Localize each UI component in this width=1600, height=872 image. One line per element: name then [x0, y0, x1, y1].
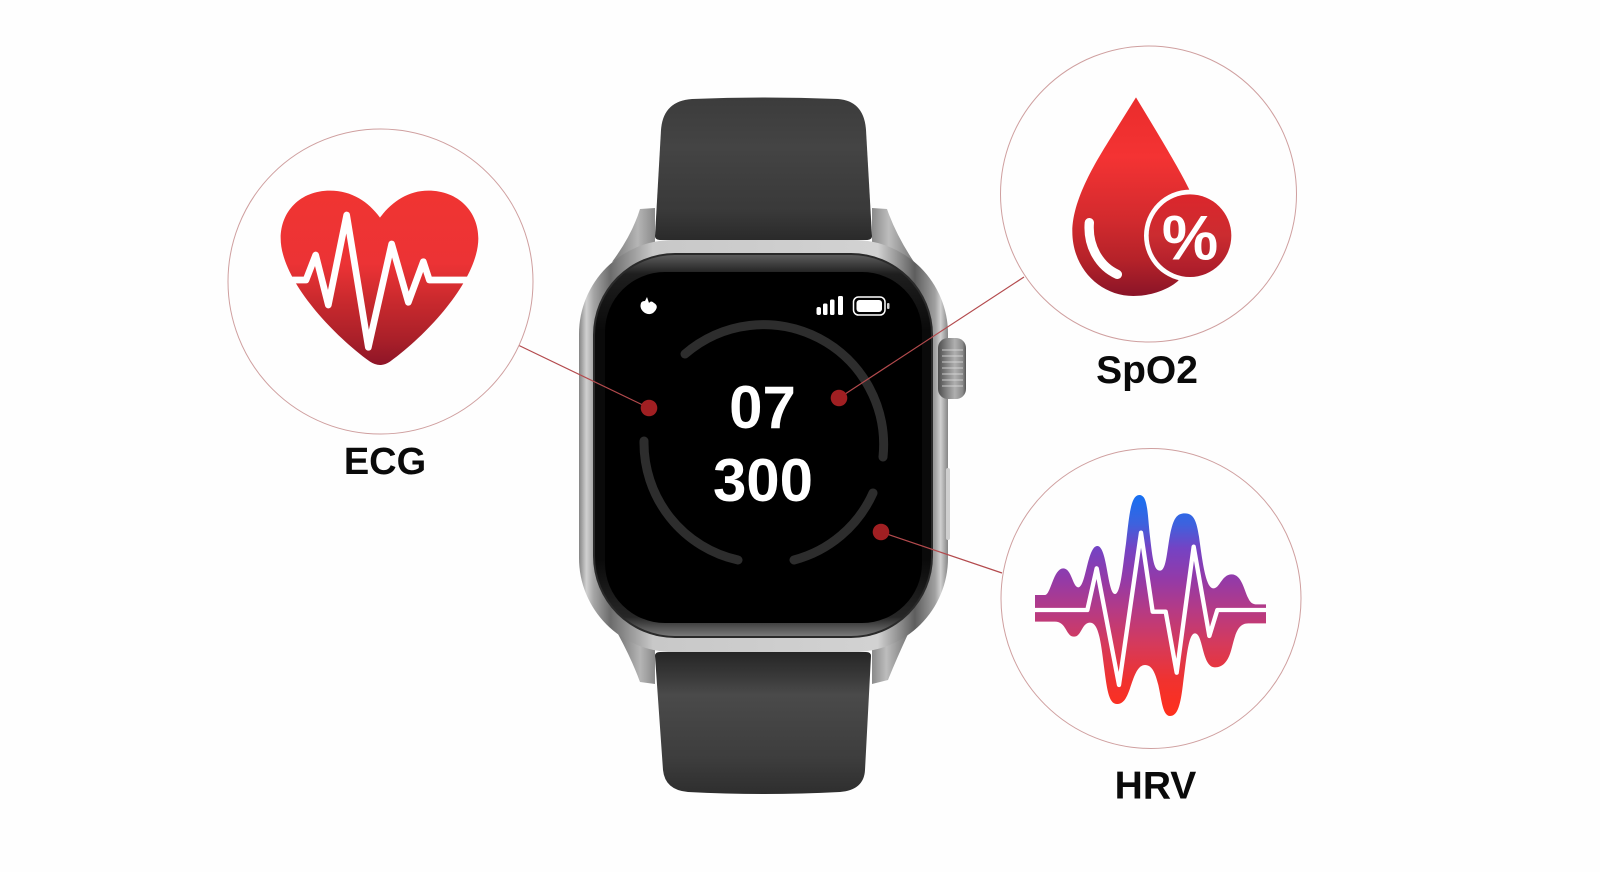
- HRV label: HRV: [1115, 764, 1196, 808]
- panel: HRV: [1001, 448, 1301, 808]
- connector: SpO2: [839, 277, 1024, 398]
- status icon: heart: [640, 297, 657, 314]
- connector: HRV: [881, 532, 1002, 573]
- icon: waveform: [1035, 495, 1266, 716]
- bottom strap: [655, 652, 871, 794]
- status icon: signal: [816, 296, 843, 315]
- ECG label: ECG: [344, 441, 426, 483]
- lugs: [612, 208, 914, 684]
- icon: blood drop with percent: %: [1162, 203, 1218, 273]
- connector: ECG: [518, 345, 649, 408]
- side button: [946, 468, 950, 540]
- case: [579, 240, 948, 652]
- panel: SpO2: [1000, 46, 1296, 392]
- marker: ECG: [641, 400, 657, 416]
- SpO2 label: SpO2: [1096, 349, 1198, 392]
- screen number 07: 07: [729, 374, 796, 441]
- status icon: battery: [854, 297, 890, 315]
- HRV circle: [1001, 448, 1301, 748]
- bezel: [595, 255, 931, 636]
- icon: heart with pulse: [281, 191, 478, 365]
- ECG circle: [228, 129, 533, 434]
- panel: ECG: [228, 129, 533, 483]
- icon: blood drop with percent: [1072, 97, 1236, 296]
- marker: SpO2: [831, 390, 847, 406]
- SpO2 circle: [1000, 46, 1296, 342]
- progress ring arcs: [644, 325, 884, 560]
- top strap: [655, 98, 872, 240]
- marker: HRV: [873, 524, 889, 540]
- screen number 300: 300: [713, 447, 813, 514]
- screen: [605, 272, 922, 623]
- smartwatch: [579, 98, 966, 794]
- digital crown: [938, 338, 966, 399]
- inner case rim: [593, 253, 933, 638]
